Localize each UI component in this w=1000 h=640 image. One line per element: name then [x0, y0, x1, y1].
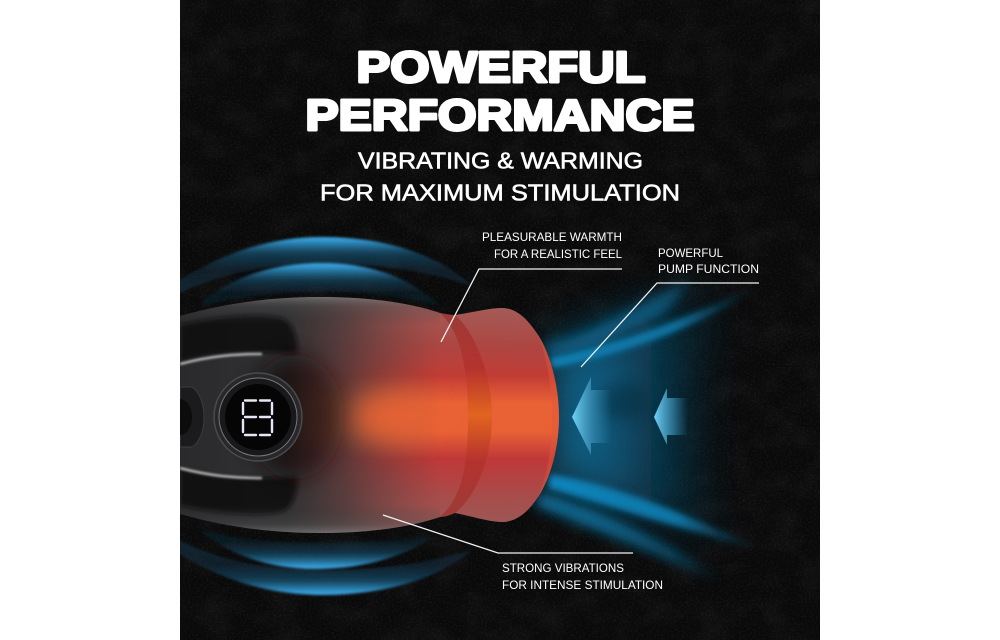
callout: warmth: FOR A REALISTIC FEEL [494, 247, 622, 261]
subtitle: VIBRATING & WARMING [358, 147, 643, 173]
display digits [243, 400, 272, 435]
callout: pump: POWERFUL [658, 246, 723, 260]
subtitle: FOR MAXIMUM STIMULATION [320, 179, 680, 205]
device body [180, 297, 559, 533]
centre shading [247, 355, 343, 479]
digital display [214, 373, 302, 461]
heated sleeve [296, 297, 559, 533]
title: PERFORMANCE [306, 91, 694, 140]
callout: vibrations: STRONG VIBRATIONS [502, 561, 624, 575]
title [306, 43, 694, 140]
vibration rings: top [170, 237, 472, 306]
callout: pump [581, 246, 759, 367]
body edge sheen [180, 297, 440, 533]
background panel [180, 0, 820, 640]
vibration rings: bottom [170, 530, 472, 595]
callout: warmth: PLEASURABLE WARMTH [482, 230, 622, 244]
subtitle [320, 147, 680, 205]
title: POWERFUL [356, 43, 646, 92]
pump airflow [535, 282, 765, 580]
callout: vibrations: FOR INTENSE STIMULATION [502, 578, 663, 592]
callout: vibrations [383, 515, 663, 592]
side button [180, 386, 204, 448]
arrow: inflow far [654, 388, 688, 445]
orange glow [353, 393, 437, 441]
dark upper grip panel [180, 315, 298, 362]
grip highlights [180, 354, 262, 478]
callout: pump: PUMP FUNCTION [658, 262, 759, 276]
arrow: inflow near [572, 377, 612, 455]
dark lower grip panel [180, 468, 298, 515]
callout: warmth [441, 230, 622, 342]
sleeve band [440, 313, 559, 517]
